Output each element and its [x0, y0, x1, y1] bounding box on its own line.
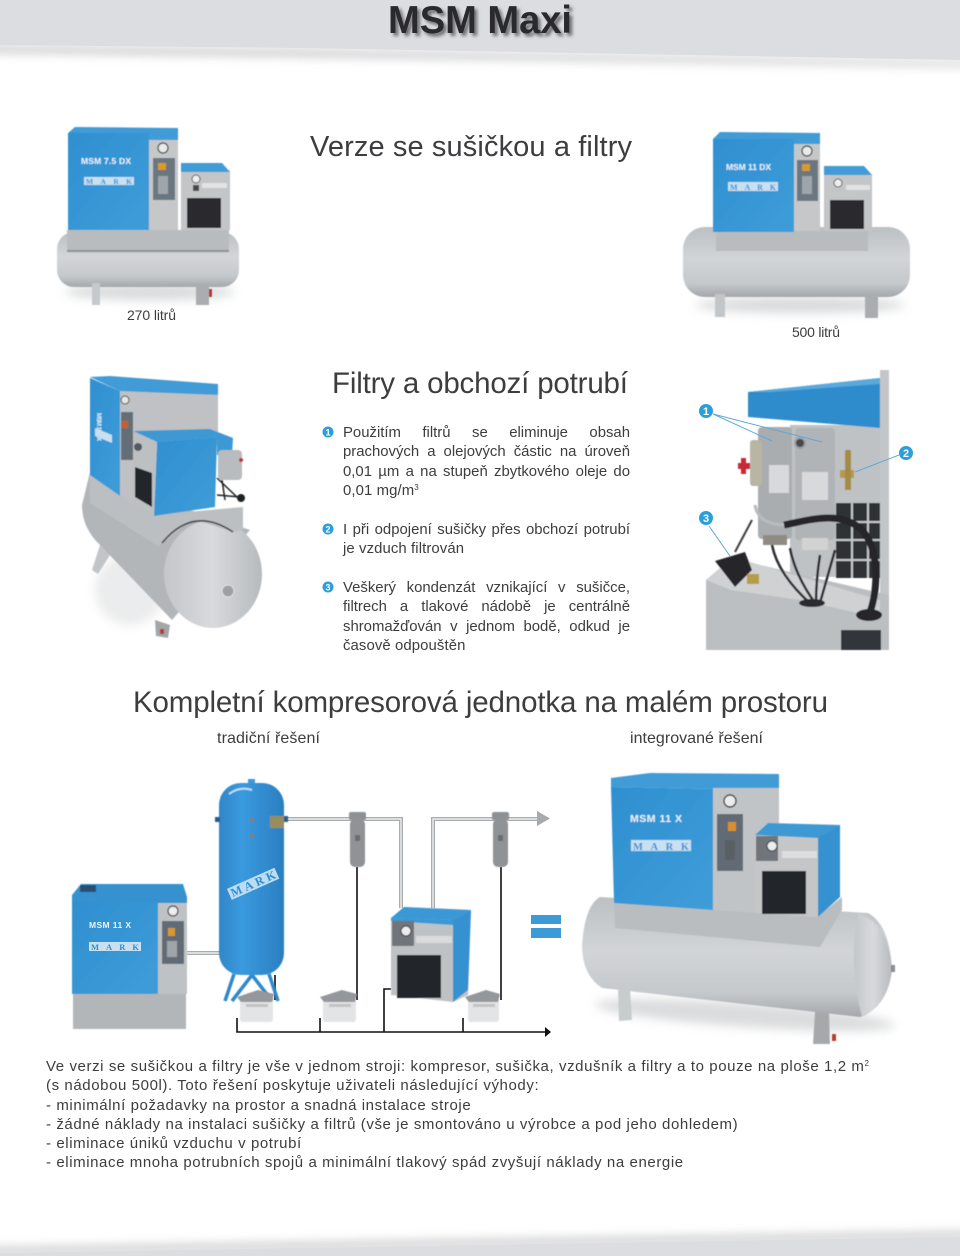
dryer — [133, 429, 233, 516]
drain unit 1 — [237, 990, 274, 1022]
blue panel — [90, 378, 120, 496]
callout 3 with leader — [699, 511, 730, 556]
item 1 text — [343, 425, 630, 499]
gauge — [802, 146, 812, 156]
text: summary paragraph — [46, 1058, 870, 1171]
lid — [90, 376, 218, 395]
base — [716, 230, 868, 251]
text: summary paragraph: - eliminace úniků vzduchu v potrubí — [46, 1135, 302, 1152]
legs — [715, 294, 878, 318]
photo: compressor 500 litres — [683, 132, 910, 318]
MARK badge — [95, 428, 112, 443]
vent grid — [836, 503, 880, 578]
item 1 text: prachových a olejových částic na úroveň — [343, 444, 630, 460]
fittings — [217, 450, 245, 502]
drain valve — [715, 520, 759, 587]
MARK badge: MARK — [730, 183, 777, 192]
dryer — [755, 823, 840, 917]
dryer — [824, 166, 872, 231]
header band — [0, 0, 960, 66]
blue panel — [68, 133, 149, 230]
black drain lines — [237, 867, 546, 1032]
legs — [618, 988, 836, 1044]
tank — [57, 232, 239, 287]
grey side — [120, 390, 218, 505]
list bullet 2 — [322, 524, 334, 534]
item 3 text — [343, 580, 630, 654]
base — [614, 897, 842, 947]
tank — [582, 897, 892, 1017]
item 2 text — [342, 522, 630, 557]
drain unit 3 — [465, 990, 500, 1022]
heading: filters and bypass: Filtry a obchozí potrubí — [332, 367, 629, 400]
list bullet 3 — [322, 582, 334, 592]
grey column — [794, 144, 820, 231]
heading: compact unit: Kompletní kompresorová jednotka na malém prostoru — [133, 686, 828, 719]
item 2 text: I při odpojení sušičky přes obchozí potrubí — [343, 522, 630, 538]
control panel — [121, 396, 133, 460]
legs — [92, 545, 170, 638]
model label: MSM 11 X — [630, 813, 682, 825]
text: summary paragraph: (s nádobou 500l). Toto řešení poskytuje uživateli následující výhody: — [46, 1077, 539, 1094]
back panel — [790, 425, 880, 577]
tank end — [164, 520, 262, 628]
tank MARK logo: MARK — [228, 867, 278, 900]
item 2 text: je vzduch filtrován — [343, 541, 464, 557]
equals sign — [531, 915, 561, 938]
model label: MSM 15 DX — [95, 413, 101, 441]
vertical air tank — [215, 779, 288, 1001]
list: filter benefits — [342, 425, 630, 654]
text: summary paragraph: Ve verzi se sušičkou a filtry je vše v jednom stroji: kompresor, sušička, vzdušník a filtry a to pouze na ploše 1,2 m2 — [46, 1058, 870, 1075]
list bullet 3: 3 — [325, 582, 331, 592]
inline filter 1 — [349, 812, 366, 867]
caption: 500 litres: 500 litrů — [792, 324, 840, 340]
callout 2 with leader — [855, 446, 913, 472]
lower box — [90, 475, 243, 546]
black hose — [784, 518, 876, 612]
callout 2 with leader: 2 — [903, 448, 909, 460]
item 3 text: Veškerý kondenzát vznikající v sušičce, — [343, 580, 630, 596]
top blue panel — [748, 378, 880, 428]
valve and fittings — [738, 438, 854, 490]
control panel — [797, 160, 818, 201]
text: summary paragraph: - minimální požadavky na prostor a snadná instalace stroje — [46, 1097, 471, 1114]
lid — [611, 773, 779, 789]
diagram: traditional installation — [72, 779, 551, 1037]
text: title: MSM Maxi — [388, 0, 572, 42]
heading: version with dryer: Verze se sušičkou a filtry — [310, 131, 632, 163]
arrow: compressed air out — [537, 811, 550, 826]
caption: 270 litres: 270 litrů — [127, 307, 176, 323]
blue panel — [713, 139, 794, 232]
gauge — [158, 143, 168, 153]
item 1 text: 0,01 µm a na stupeň zbytkového oleje do — [343, 464, 630, 480]
MARK badge: MARK — [86, 177, 132, 186]
label: integrated solution: integrované řešení — [630, 730, 764, 747]
base — [706, 557, 889, 650]
photo: compressor side view — [82, 376, 262, 638]
lid — [713, 132, 820, 146]
item 1 text: Použitím filtrů se eliminuje obsah — [343, 425, 630, 441]
model label: MSM 7.5 DX — [81, 156, 131, 166]
item 1 text: 0,01 mg/m3 — [343, 483, 419, 499]
photo: integrated compressor — [582, 773, 895, 1044]
item 3 text: časově odpouštěn — [343, 638, 465, 654]
grey column — [713, 788, 779, 913]
control panel — [153, 158, 175, 200]
callout 1 with leaders: 1 — [703, 406, 709, 418]
model label: MSM 11 DX — [726, 162, 771, 172]
list bullet 1: 1 — [325, 428, 331, 438]
footer band — [0, 1232, 960, 1256]
grey column — [149, 140, 178, 230]
MARK badge: MARK — [633, 842, 690, 853]
compressor model label: MSM 11 X — [89, 920, 131, 930]
filter left — [758, 427, 792, 545]
legs — [92, 283, 212, 305]
gauge — [724, 795, 736, 807]
drain unit 2 — [320, 990, 357, 1022]
callout 1 with leaders — [699, 404, 822, 442]
label: traditional solution: tradiční řešení — [217, 730, 321, 747]
dryer — [181, 163, 230, 230]
item 3 text: filtrech a tlakové nádobě je centrálně — [343, 599, 630, 615]
base — [67, 230, 229, 251]
item 3 text: shromažďován v jednom bodě, odkud je — [343, 619, 630, 635]
tank — [683, 227, 910, 297]
compressor MARK badge: MARK — [91, 942, 139, 952]
photo: filter detail — [706, 370, 889, 650]
text: summary paragraph: - eliminace mnoha potrubních spojů a minimální tlakový spád zvyšují náklady na energie — [46, 1154, 684, 1171]
compressor unit — [72, 884, 187, 1029]
tank body — [82, 472, 250, 620]
photo: compressor 270 litres — [57, 127, 239, 305]
inline filter 2 — [492, 812, 509, 867]
dryer — [391, 907, 471, 1002]
right post — [880, 370, 889, 650]
list bullet 1 — [322, 426, 334, 438]
arrow: drain out — [545, 1027, 551, 1037]
tank plug — [222, 585, 234, 597]
control panel — [717, 814, 743, 871]
lid — [68, 127, 178, 143]
filter right — [795, 428, 835, 550]
text: summary paragraph: - žádné náklady na instalaci sušičky a filtrů (vše je smontováno u výrobce a pod jeho dohledem) — [46, 1116, 738, 1133]
list bullet 2: 2 — [325, 524, 331, 534]
blue panel — [611, 787, 713, 910]
thin hoses — [772, 545, 835, 605]
air pipes — [187, 819, 538, 953]
callout 3 with leader: 3 — [703, 513, 709, 525]
